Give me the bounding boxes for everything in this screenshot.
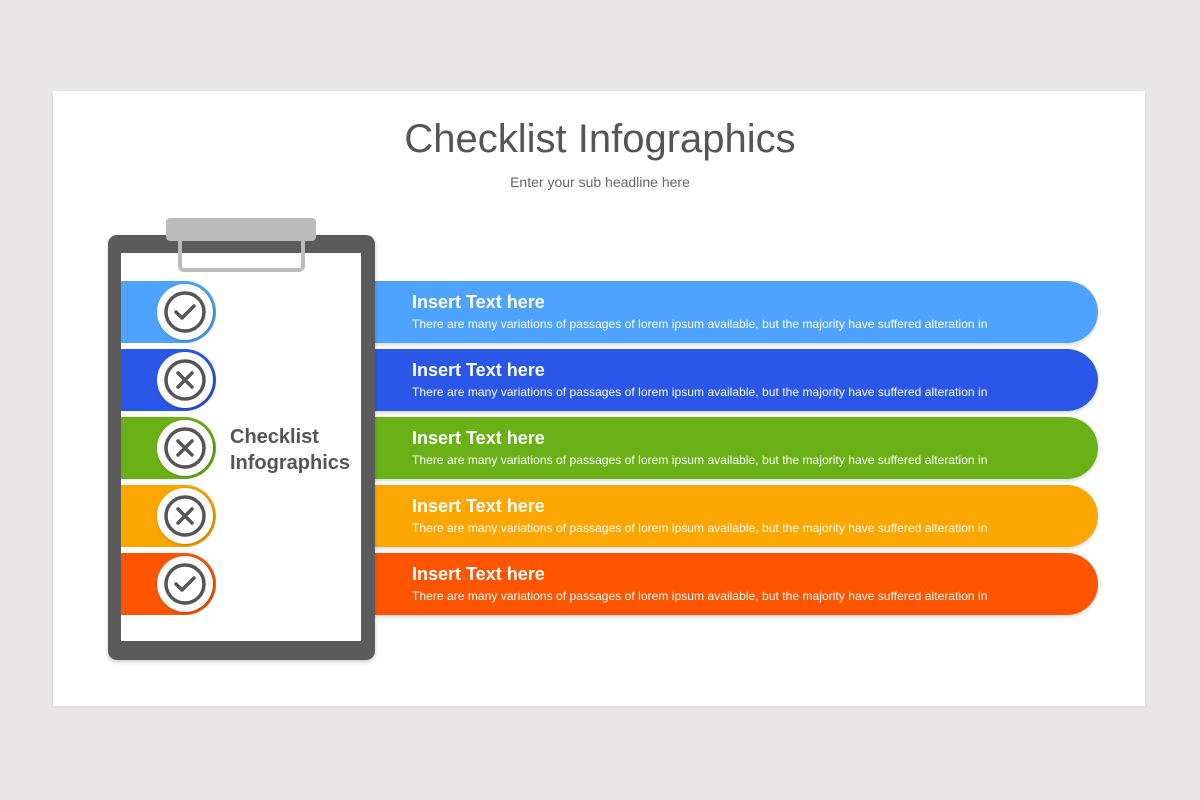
bar 1: Insert Text here bbox=[412, 292, 545, 312]
strips with icons bbox=[121, 281, 216, 343]
bar 3 bbox=[370, 417, 1098, 479]
background card bbox=[53, 91, 1145, 706]
bar 2: Insert Text here bbox=[412, 360, 545, 380]
paper bbox=[121, 253, 361, 641]
clipboard label: Infographics bbox=[230, 452, 350, 474]
icon: check 5 bbox=[157, 556, 213, 612]
bar 2: There are many variations of passages of lorem ipsum available, but the majority have suffered alteration in bbox=[412, 385, 987, 399]
bar 4 bbox=[370, 485, 1098, 547]
bar 3: There are many variations of passages of lorem ipsum available, but the majority have suffered alteration in bbox=[412, 453, 987, 467]
bar 1 bbox=[370, 281, 1098, 343]
bar 3: Insert Text here bbox=[412, 428, 545, 448]
bar 4: Insert Text here bbox=[412, 496, 545, 516]
icon: x 3 bbox=[157, 420, 213, 476]
bar 5: There are many variations of passages of lorem ipsum available, but the majority have suffered alteration in bbox=[412, 589, 987, 603]
icon: x 4 bbox=[157, 488, 213, 544]
icon: check 1 bbox=[157, 284, 213, 340]
clip bbox=[166, 218, 316, 272]
clipboard label: Checklist bbox=[230, 426, 319, 448]
bar 1: There are many variations of passages of lorem ipsum available, but the majority have suffered alteration in bbox=[412, 317, 987, 331]
bar 2 bbox=[370, 349, 1098, 411]
bar 4: There are many variations of passages of lorem ipsum available, but the majority have suffered alteration in bbox=[412, 521, 987, 535]
bar 5 bbox=[370, 553, 1098, 615]
subtitle: Enter your sub headline here bbox=[510, 174, 690, 190]
icon: x 2 bbox=[157, 352, 213, 408]
clipboard bbox=[108, 235, 375, 660]
title: Checklist Infographics bbox=[404, 117, 796, 161]
clipboard label bbox=[230, 426, 350, 474]
bar 5: Insert Text here bbox=[412, 564, 545, 584]
